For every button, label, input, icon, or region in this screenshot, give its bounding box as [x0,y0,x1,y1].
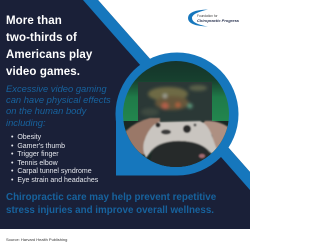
intro text: Excessive video gaming [6,83,107,94]
logo name: Chiropractic Progress [197,18,239,22]
closing message: Chiropractic care may help prevent repetitive [6,192,216,203]
intro text [6,83,111,128]
photo: hands holding game controller before TV [123,61,229,167]
diagonal blue band [83,0,250,190]
panel: dark background [0,0,250,229]
bullet list: • Trigger finger [11,151,59,158]
title: More than [6,14,62,26]
right hand [202,120,228,149]
logo small line: Foundation for [197,14,218,18]
bullet list: • Eye strain and headaches [11,177,98,184]
background panel with photo [0,0,250,229]
logo mark: blue arc [188,10,208,26]
bullet list: • Gamer's thumb [11,143,65,150]
title: two-thirds of [6,32,77,44]
bullet list: • Carpal tunnel syndrome [11,168,92,175]
controller [143,121,217,158]
title [6,14,92,78]
bullet list [11,134,98,184]
logo [188,10,239,26]
bullet list: • Obesity [11,134,41,141]
intro text: can have physical effects [6,94,111,105]
closing message: stress injuries and improve overall wellness. [6,205,214,216]
closing message [6,192,216,216]
intro text: on the human body [6,105,86,116]
left hand [124,118,160,155]
intro text: including: [6,117,46,128]
source note: Source: Harvard Health Publishing [6,236,67,242]
blue circle frame [116,52,238,176]
title: video games. [6,66,80,78]
title: Americans play [6,48,92,60]
bullet list: • Tennis elbow [11,160,58,167]
